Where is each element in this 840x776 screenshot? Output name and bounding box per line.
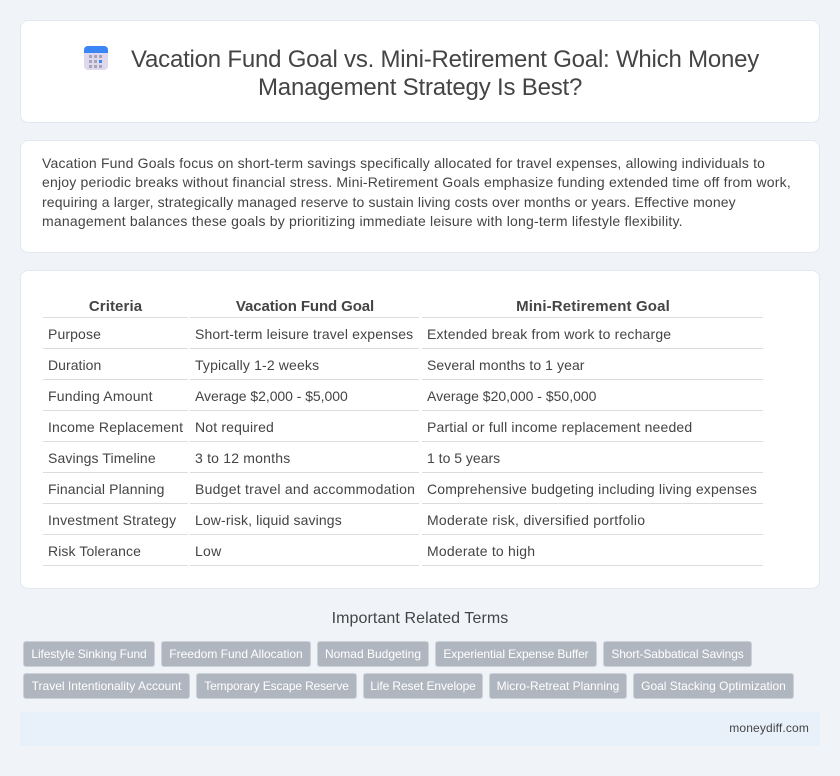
comparison table <box>43 298 763 566</box>
row: Funding Amount: Average $2,000 - $5,000 <box>195 388 348 404</box>
tag <box>603 641 752 667</box>
row: Savings Timeline: 3 to 12 months <box>195 450 290 466</box>
tag: Lifestyle Sinking Fund <box>31 647 147 661</box>
related term tags <box>23 641 794 699</box>
intro text panel <box>20 140 820 253</box>
tag <box>196 673 357 699</box>
tag: Short-Sabbatical Savings <box>611 647 744 661</box>
tag <box>23 641 155 667</box>
row: Investment Strategy <box>48 512 645 528</box>
row: Financial Planning: Comprehensive budgeting including living expenses <box>427 481 757 497</box>
tag: Micro-Retreat Planning <box>497 679 619 693</box>
row: Investment Strategy: Investment Strategy <box>48 512 176 528</box>
tag: Freedom Fund Allocation <box>169 647 303 661</box>
intro paragraph: enjoy periodic breaks without financial stress. Mini-Retirement Goals emphasize funding extended time off from work, <box>42 174 791 190</box>
footer bar <box>20 712 820 746</box>
intro paragraph: requiring a larger, strategically managed reserve to sustain living costs over months or years. Effective money <box>42 194 736 210</box>
row: Financial Planning <box>48 481 757 497</box>
tag <box>23 673 190 699</box>
row: Savings Timeline: 1 to 5 years <box>427 450 500 466</box>
row: Duration: Duration <box>48 357 101 373</box>
row: Risk Tolerance <box>48 543 535 559</box>
tag <box>633 673 794 699</box>
tag <box>435 641 597 667</box>
row: Funding Amount <box>48 388 596 404</box>
tag: Nomad Budgeting <box>325 647 421 661</box>
row: Purpose: Purpose <box>48 326 101 342</box>
related terms heading: Important Related Terms <box>332 610 508 627</box>
tag <box>363 673 483 699</box>
table header row <box>89 298 670 315</box>
row: Financial Planning: Budget travel and accommodation <box>195 481 415 497</box>
tag: Travel Intentionality Account <box>32 679 181 693</box>
comparison table panel <box>20 270 820 589</box>
row: Duration: Typically 1-2 weeks <box>195 357 319 373</box>
title <box>131 46 760 101</box>
row: Purpose <box>48 326 671 342</box>
icon: calendar <box>84 46 108 70</box>
row: Risk Tolerance: Moderate to high <box>427 543 535 559</box>
row: Investment Strategy: Moderate risk, diversified portfolio <box>427 512 645 528</box>
row: Risk Tolerance: Low <box>195 543 221 559</box>
row: Income Replacement: Income Replacement <box>48 419 183 435</box>
row: Purpose: Short-term leisure travel expenses <box>195 326 413 342</box>
intro paragraph: management balances these goals by prioritizing immediate leisure with long-term lifestyle flexibility. <box>42 213 683 229</box>
row: Income Replacement: Not required <box>195 419 274 435</box>
tag: Goal Stacking Optimization <box>641 679 786 693</box>
footer source text: moneydiff.com <box>729 721 809 735</box>
title: Management Strategy Is Best? <box>258 74 582 101</box>
table header row: Mini-Retirement Goal <box>516 298 670 315</box>
row: Duration <box>48 357 585 373</box>
row: Savings Timeline: Savings Timeline <box>48 450 156 466</box>
row: Funding Amount: Funding Amount <box>48 388 153 404</box>
row: Savings Timeline <box>48 450 500 466</box>
tag <box>317 641 429 667</box>
title: Vacation Fund Goal vs. Mini-Retirement Goal: Which Money <box>131 46 759 73</box>
row: Risk Tolerance: Risk Tolerance <box>48 543 141 559</box>
row: Purpose: Extended break from work to recharge <box>427 326 671 342</box>
intro paragraph <box>42 155 791 229</box>
row: Investment Strategy: Low-risk, liquid savings <box>195 512 342 528</box>
table header row: Criteria <box>89 298 142 315</box>
row: Financial Planning: Financial Planning <box>48 481 165 497</box>
intro paragraph: Vacation Fund Goals focus on short-term savings specifically allocated for travel expenses, allowing individuals to <box>42 155 765 171</box>
header panel <box>20 20 820 123</box>
tag: Temporary Escape Reserve <box>204 679 349 693</box>
row: Income Replacement: Partial or full income replacement needed <box>427 419 692 435</box>
tag: Life Reset Envelope <box>370 679 476 693</box>
tag <box>489 673 627 699</box>
row: Funding Amount: Average $20,000 - $50,000 <box>427 388 596 404</box>
tag <box>161 641 311 667</box>
row: Income Replacement <box>48 419 692 435</box>
tag: Experiential Expense Buffer <box>443 647 589 661</box>
row: Duration: Several months to 1 year <box>427 357 585 373</box>
table header row: Vacation Fund Goal <box>236 298 374 315</box>
